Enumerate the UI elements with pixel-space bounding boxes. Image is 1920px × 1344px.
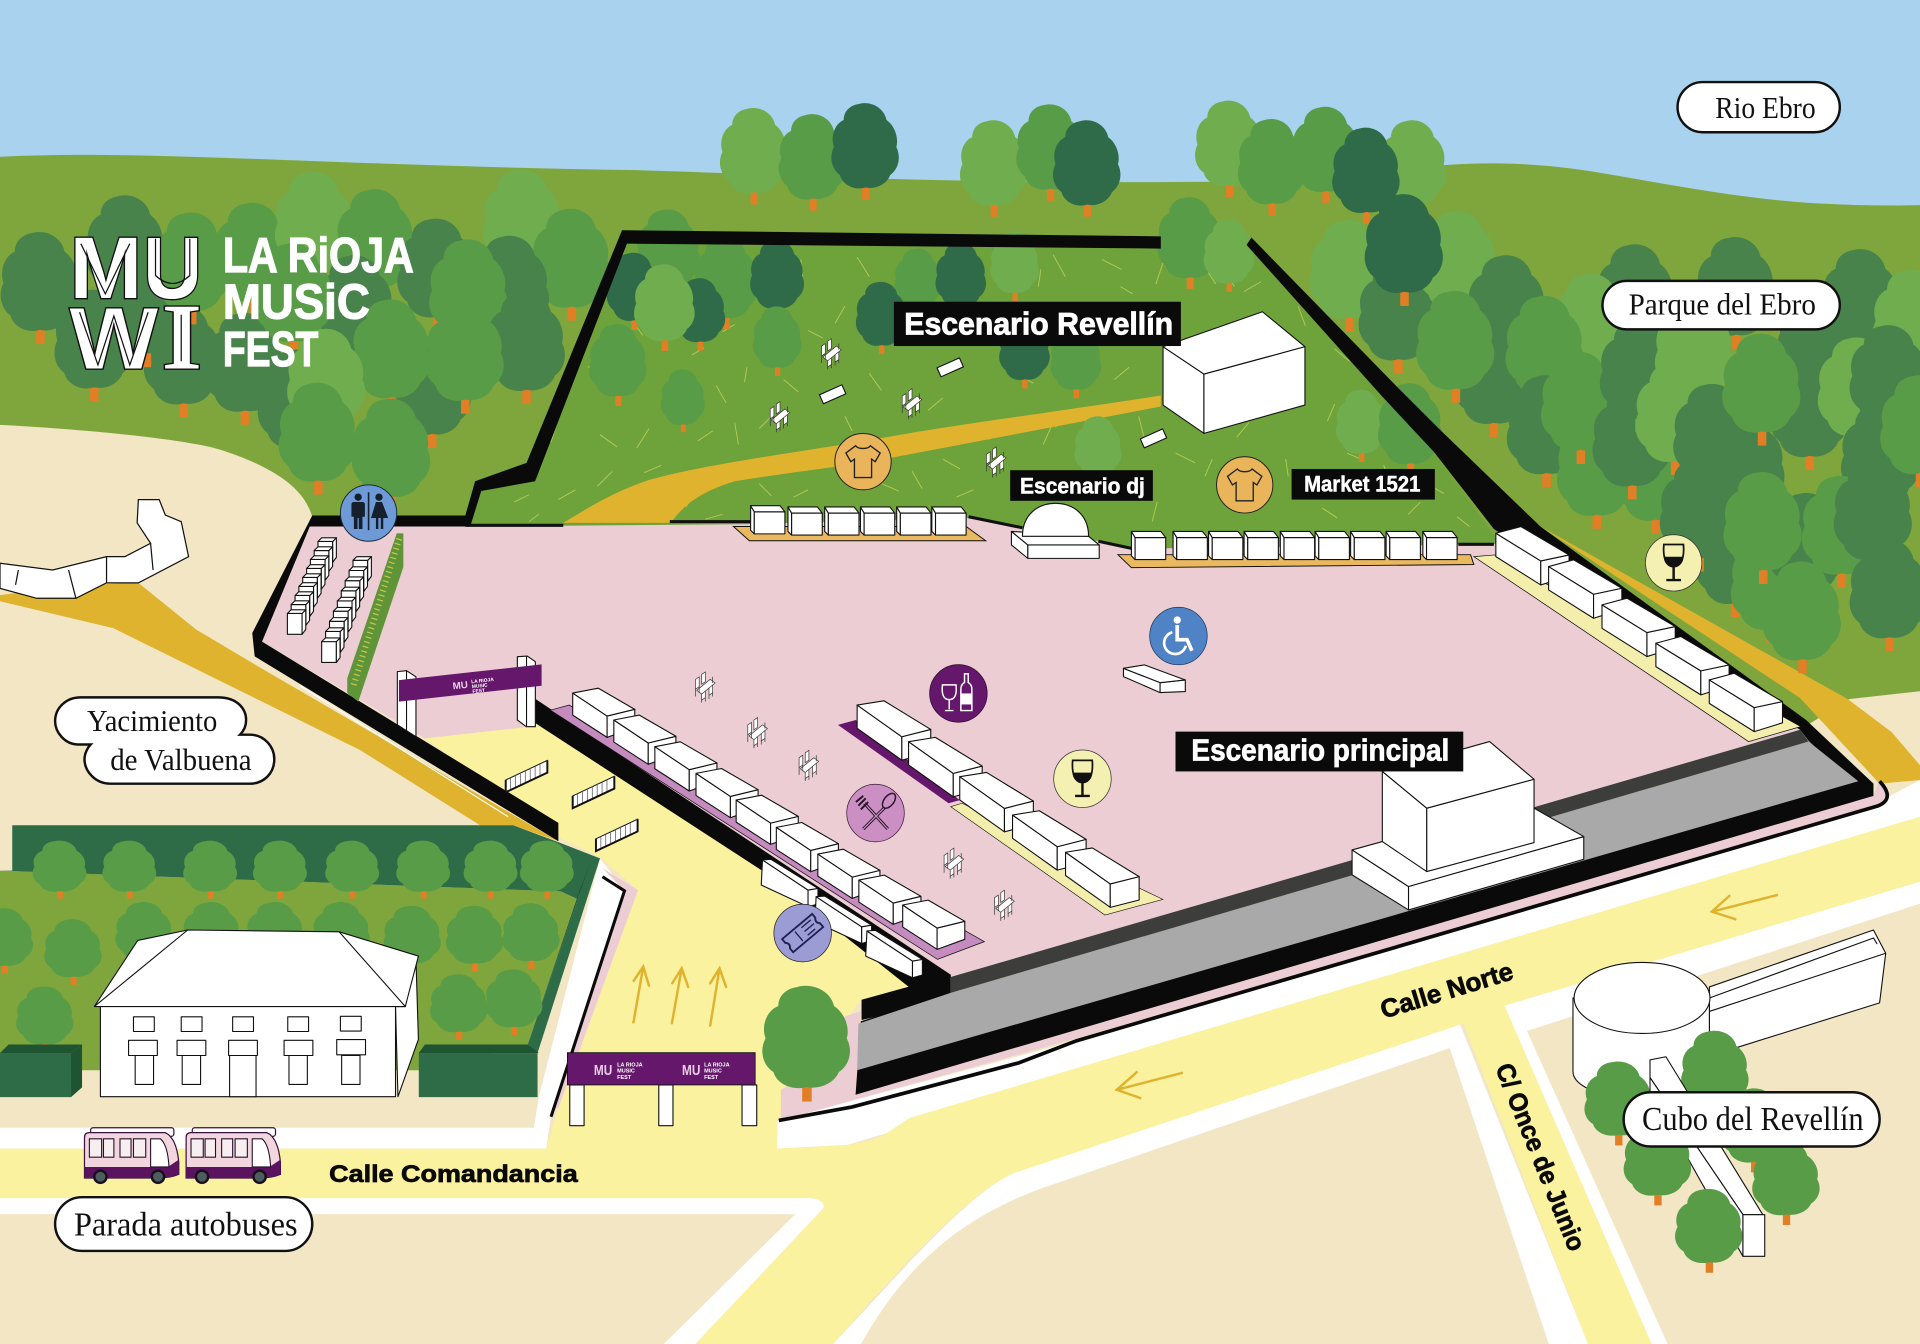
- background: river sky: [0, 0, 1920, 269]
- hedge: WC screen: [347, 533, 403, 702]
- orchard side hedge: [528, 860, 591, 1044]
- trees: west cluster: [1, 170, 610, 510]
- orchard ground: [0, 871, 577, 1070]
- icon: ticket: [774, 904, 831, 962]
- street label: C/ Once de Junio: C/ Once de Junio: [1490, 1060, 1590, 1255]
- callout: Cubo del Revellín: Cubo del Revellín: [1642, 1100, 1864, 1138]
- callout: Rio Ebro: Rio Ebro: [1715, 91, 1816, 125]
- road: thin black line beside orchard: [551, 877, 624, 1117]
- callout: Rio Ebro: [1678, 82, 1840, 132]
- road: white kerbs: [0, 780, 1920, 1344]
- hedge: front right: [419, 1044, 539, 1097]
- gate: main festival arch: MU: [452, 680, 469, 692]
- picnic tables: [696, 339, 1014, 921]
- road: thin outer line: [779, 781, 1887, 1120]
- logo line Music: MUSiC: [223, 275, 370, 329]
- arrow: Calle Norte west: [1117, 1071, 1183, 1098]
- booths: Market 1521 row: [1118, 531, 1474, 568]
- gate: road entrance arch: MU: [594, 1063, 612, 1079]
- callout: Parada autobuses: Parada autobuses: [74, 1206, 298, 1244]
- icon: merchandise t-shirt: [835, 433, 891, 490]
- heading: Escenario dj: Escenario dj: [1020, 473, 1145, 498]
- orchard tree rows: [0, 841, 574, 1052]
- gate: road entrance arch: FEST: [704, 1075, 719, 1081]
- arrows: entrance direction: [633, 967, 726, 1026]
- gate: main festival arch: FEST: [472, 688, 485, 695]
- panel: festival pink ground: [262, 518, 1800, 977]
- logo line Fest: FEST: [223, 323, 318, 377]
- gate: road entrance arch: [567, 1053, 757, 1126]
- icon: wine and bottle: [930, 665, 987, 722]
- ruins: Yacimiento de Valbuena path: [0, 583, 558, 841]
- callout: Parque del Ebro: Parque del Ebro: [1629, 288, 1816, 322]
- verge: pink strip beside orchard: [553, 868, 638, 1108]
- panel: orchard: [0, 825, 600, 1097]
- orchard side hedge face: [528, 858, 600, 1053]
- road: Calle Comandancia, plaza and Calle Norte: [0, 716, 1920, 1344]
- booths: food row: [550, 688, 984, 959]
- icon: toilets: [340, 485, 397, 541]
- logo mark M: M: [70, 220, 142, 317]
- heading: Escenario Revellín: Escenario Revellín: [904, 305, 1173, 341]
- trees: Cubo del Revellín (front): [1624, 1121, 1820, 1273]
- callout: Parada autobuses: [55, 1197, 312, 1251]
- logo stripes: [80, 239, 190, 365]
- icon: fork and spoon: [847, 784, 904, 842]
- wall: south perimeter: [856, 742, 1873, 1095]
- callout: Yacimiento de Valbuena: Yacimiento: [87, 704, 217, 738]
- callout: Yacimiento de Valbuena: [55, 697, 274, 784]
- arrow: Calle Norte east: [1712, 895, 1778, 920]
- street label: Calle Comandancia: Calle Comandancia: [329, 1161, 578, 1188]
- icon: buses: [84, 1128, 280, 1183]
- booths: central bar row: [838, 701, 1163, 915]
- tree: beside road gate: [762, 986, 850, 1102]
- gate: road entrance arch: LA RIOJA: [617, 1063, 643, 1069]
- callout: Cubo del Revellín: [1624, 1092, 1880, 1146]
- path: gold trail along east wall: [1540, 527, 1920, 784]
- building: Cubo del Revellín: [1573, 930, 1886, 1096]
- building: Revellín narrow wall: [1650, 1057, 1765, 1256]
- gate: road entrance arch: FEST: [617, 1075, 632, 1081]
- background: sand ground: [0, 392, 1920, 1344]
- road: service strip pink verge: [781, 782, 1889, 1120]
- road: C/ Once de Junio: [1458, 998, 1652, 1344]
- meadow boundary line: [465, 517, 1494, 549]
- street label: Calle Norte: Calle Norte: [1377, 958, 1517, 1025]
- wall: entrance side fence: [536, 699, 951, 1020]
- gate: main festival arch: MUSIC: [472, 682, 488, 690]
- gate: main festival arch: [397, 656, 542, 737]
- icon: accessibility: [1150, 607, 1207, 665]
- heading: Market 1521: Market 1521: [1304, 472, 1420, 497]
- gate: main festival arch: LA RIOJA: [471, 677, 495, 685]
- gate: road entrance arch: MUSIC: [704, 1069, 722, 1075]
- logo: MUWI La Rioja Music Fest: [70, 220, 414, 390]
- path: gold trail through meadow: [563, 396, 1161, 523]
- callout: Parque del Ebro: [1602, 281, 1840, 329]
- road: backstage grey road: [857, 742, 1858, 1070]
- toilets: west row: [287, 538, 336, 634]
- logo mark U: U: [143, 220, 202, 317]
- accessible platform: [1123, 665, 1185, 693]
- callout: Yacimiento de Valbuena: de Valbuena: [110, 743, 252, 777]
- building: Comandancia house: [94, 930, 418, 1097]
- wall: north-east perimeter: [1247, 238, 1873, 798]
- background: green hill: [0, 155, 1920, 857]
- icon: Market t-shirt: [1217, 457, 1273, 513]
- trees: meadow: [589, 197, 1442, 484]
- entrance: access barriers: [506, 760, 638, 851]
- logo line La Rioja: LA RiOJA: [223, 229, 414, 283]
- gate: road entrance arch: MUSIC: [617, 1069, 635, 1075]
- trees: northern riverbank rows: [720, 101, 1446, 224]
- stage: Escenario principal: [1352, 742, 1584, 910]
- wall: north and west perimeter: [252, 230, 1161, 841]
- toilets: east row: [322, 557, 371, 662]
- panel: Revellín meadow: [465, 244, 1500, 549]
- booths: north market row 1: [733, 506, 986, 541]
- icon: wine central: [1054, 750, 1111, 808]
- ruins: Yacimiento wall: [0, 500, 189, 598]
- booths: ticket offices: [761, 859, 922, 978]
- gate: road entrance arch: MU: [682, 1063, 700, 1079]
- stage: Escenario Revellín: [1163, 312, 1305, 433]
- hedge: front left: [0, 1044, 82, 1097]
- road: backstage dark strip: [950, 730, 1809, 993]
- stage: Escenario dj dome: [1011, 503, 1099, 558]
- logo mark I: I: [162, 286, 202, 390]
- gate: road entrance arch: LA RIOJA: [704, 1063, 730, 1069]
- booths: north-east drink row: [1474, 527, 1801, 742]
- trees: Parque del Ebro cluster: [1310, 194, 1920, 673]
- meadow benches: [819, 358, 1167, 448]
- logo mark W: W: [70, 291, 158, 388]
- trees: Cubo del Revellín (back): [1584, 1031, 1788, 1172]
- icon: wine east: [1645, 535, 1702, 591]
- orchard back hedge: [0, 825, 600, 899]
- wall: hairline: [300, 686, 508, 817]
- heading: Escenario principal: Escenario principal: [1191, 733, 1449, 767]
